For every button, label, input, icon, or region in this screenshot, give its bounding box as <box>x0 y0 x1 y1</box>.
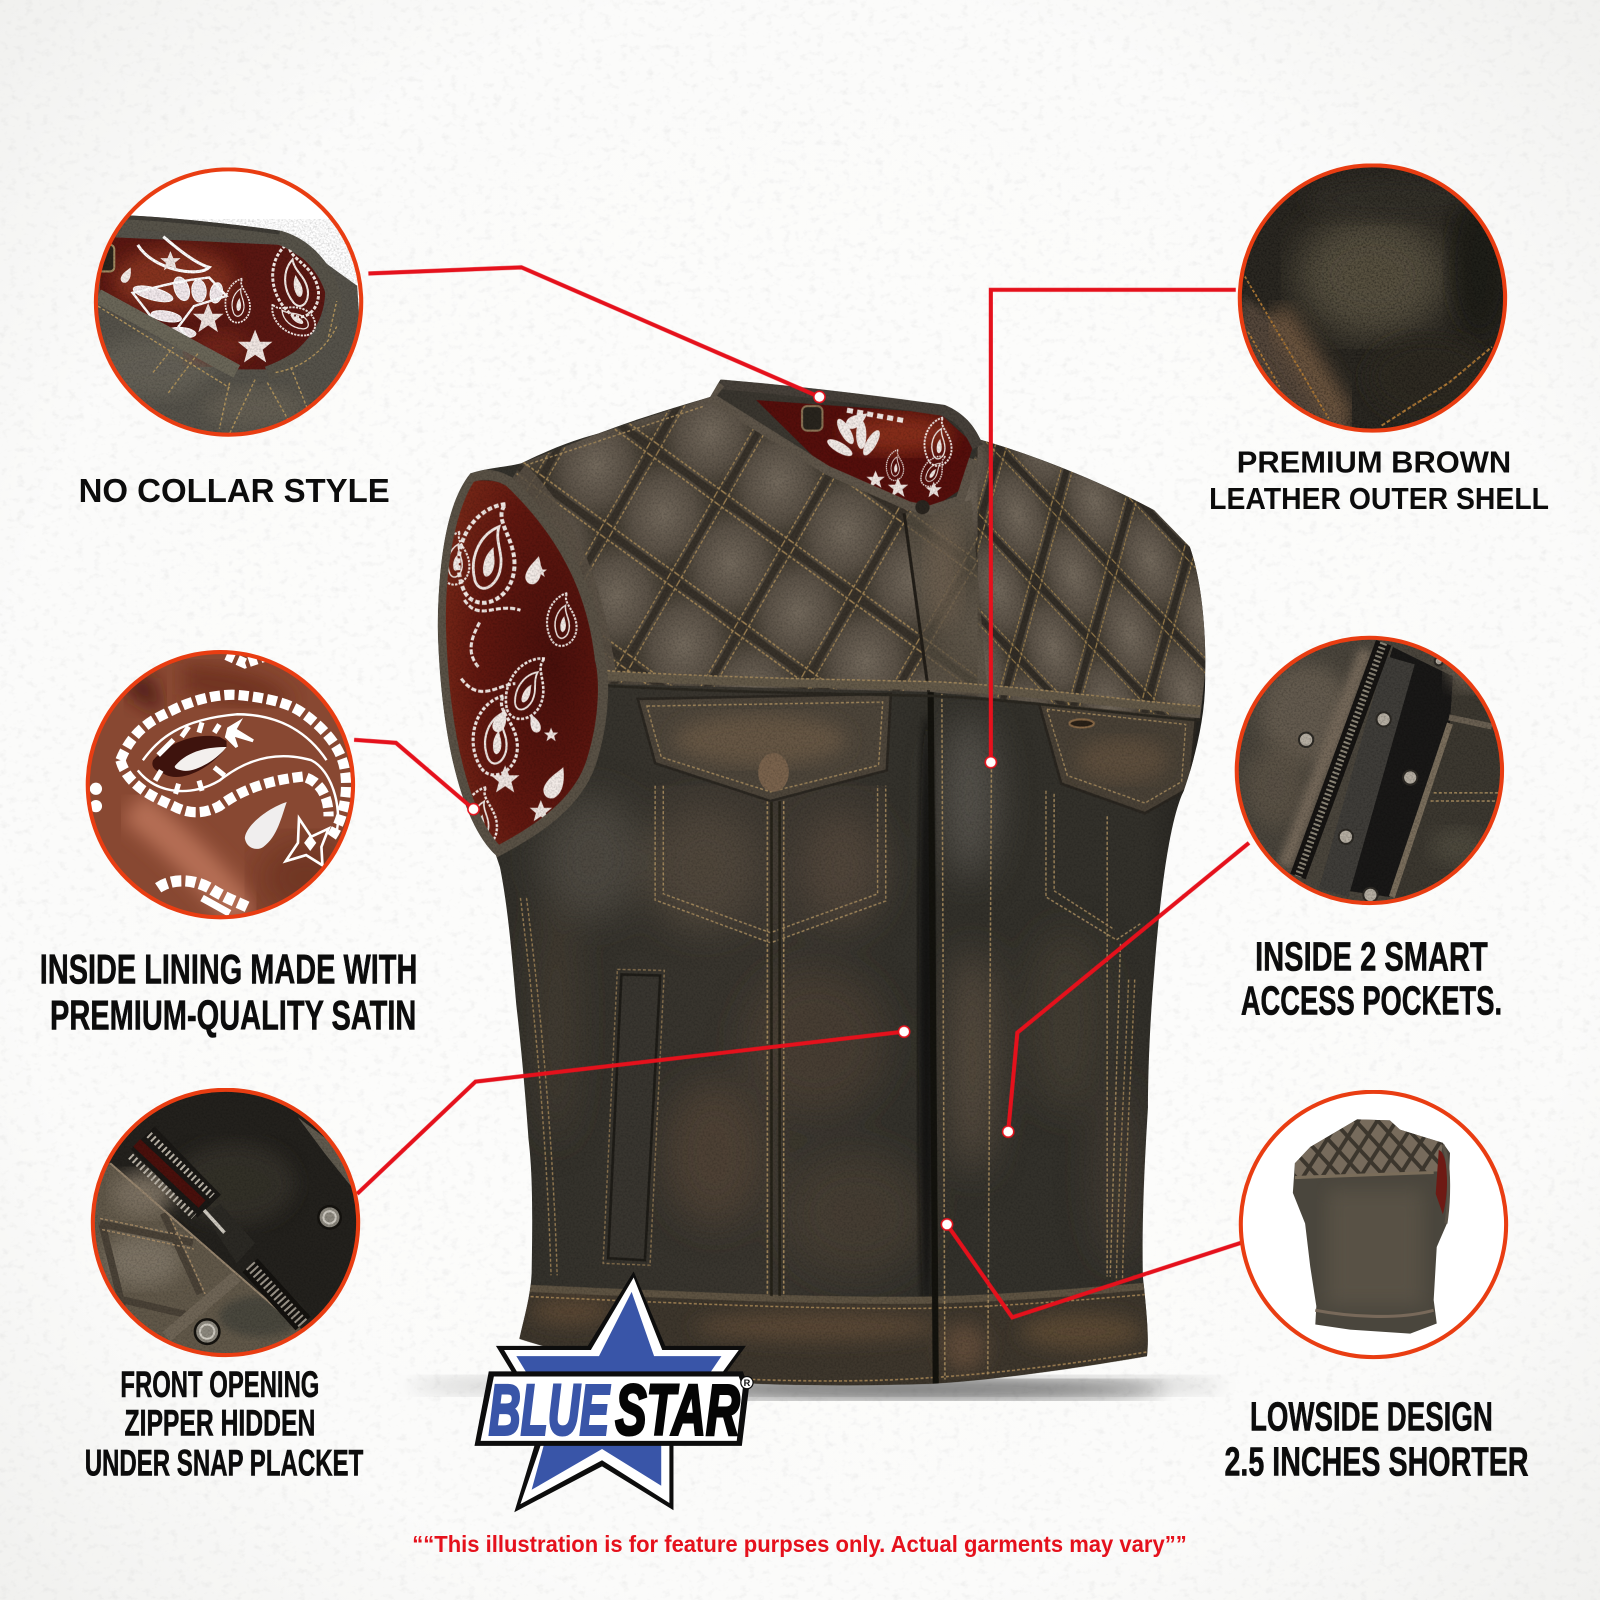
yoke seam <box>602 676 1200 710</box>
disclaimer note: ““This illustration is for feature purpses only. Actual garments may vary”” <box>412 1531 1187 1557</box>
left flap <box>638 694 891 801</box>
hem band <box>510 1286 1153 1390</box>
heading: smart pockets: INSIDE 2 SMART <box>1255 933 1488 979</box>
heading: front opening: FRONT OPENING <box>120 1364 319 1405</box>
logo text blue: BLUE <box>489 1371 611 1451</box>
logo registered mark <box>741 1377 753 1389</box>
circle: leather shell detail <box>1235 163 1510 439</box>
heading: premium brown leather: LEATHER OUTER SHELL <box>1209 482 1549 516</box>
logo star <box>496 1271 746 1512</box>
heading: front opening: UNDER SNAP PLACKET <box>85 1443 364 1484</box>
circle: no collar detail <box>92 163 367 439</box>
vest photo illustration <box>429 367 1224 1398</box>
yoke <box>509 397 1205 718</box>
logo text star: STAR <box>615 1371 740 1451</box>
circle: lowside back view detail <box>1235 1087 1515 1367</box>
vest ground shadow <box>408 1377 1224 1399</box>
upper right panel <box>298 1117 357 1194</box>
heading: satin lining: INSIDE LINING MADE WITH <box>40 946 417 993</box>
heading: smart pockets <box>1241 933 1502 1023</box>
shoulder seam <box>526 406 704 465</box>
heading: front opening: ZIPPER HIDDEN <box>124 1403 315 1444</box>
neck lining <box>756 400 973 510</box>
heading: front opening <box>85 1364 364 1484</box>
logo registered mark: R <box>744 1378 751 1388</box>
side seam stitching <box>520 898 1135 1281</box>
line: satin lining <box>354 740 473 809</box>
lower paisley <box>158 881 250 908</box>
heading: lowside design: LOWSIDE DESIGN <box>1250 1394 1493 1440</box>
line: no collar <box>368 267 819 397</box>
teardrop <box>245 802 287 849</box>
top and left motifs <box>227 655 263 663</box>
armhole binding <box>441 475 603 851</box>
collar binding <box>710 397 973 510</box>
zipper pull <box>204 1204 255 1263</box>
connector dots <box>468 391 1014 1230</box>
logo: Blue Star <box>474 1271 753 1512</box>
right flap <box>1038 699 1196 813</box>
circle: front opening zipper detail <box>87 1082 367 1362</box>
right chest pocket <box>1046 791 1141 1277</box>
line: smart pockets <box>1008 843 1249 1132</box>
neck snap <box>802 406 822 431</box>
heading: premium brown leather: PREMIUM BROWN <box>1237 445 1511 479</box>
armhole lining <box>442 480 600 849</box>
side welt pocket <box>608 974 660 1260</box>
line: leather shell <box>991 290 1236 762</box>
zipper teeth <box>143 1138 209 1206</box>
line: front opening <box>357 1032 904 1194</box>
outlined star <box>286 818 329 865</box>
heading: premium brown leather <box>1209 445 1549 516</box>
placket <box>931 690 936 1384</box>
heading: satin lining: PREMIUM-QUALITY SATIN <box>50 992 416 1039</box>
heading: satin lining <box>40 946 417 1039</box>
flower motif <box>132 275 224 339</box>
left chest pocket <box>655 786 886 943</box>
heading: no collar style: NO COLLAR STYLE <box>79 473 390 510</box>
circle: smart access pockets detail <box>1230 612 1510 913</box>
line: lowside <box>947 1224 1241 1317</box>
heading: lowside design <box>1224 1394 1529 1485</box>
collar snap <box>98 245 114 271</box>
large paisley <box>120 695 346 837</box>
connector lines <box>354 267 1249 1317</box>
logo wordmark box <box>474 1371 749 1446</box>
circle: satin lining detail <box>82 648 362 923</box>
leather channels <box>100 1213 200 1316</box>
